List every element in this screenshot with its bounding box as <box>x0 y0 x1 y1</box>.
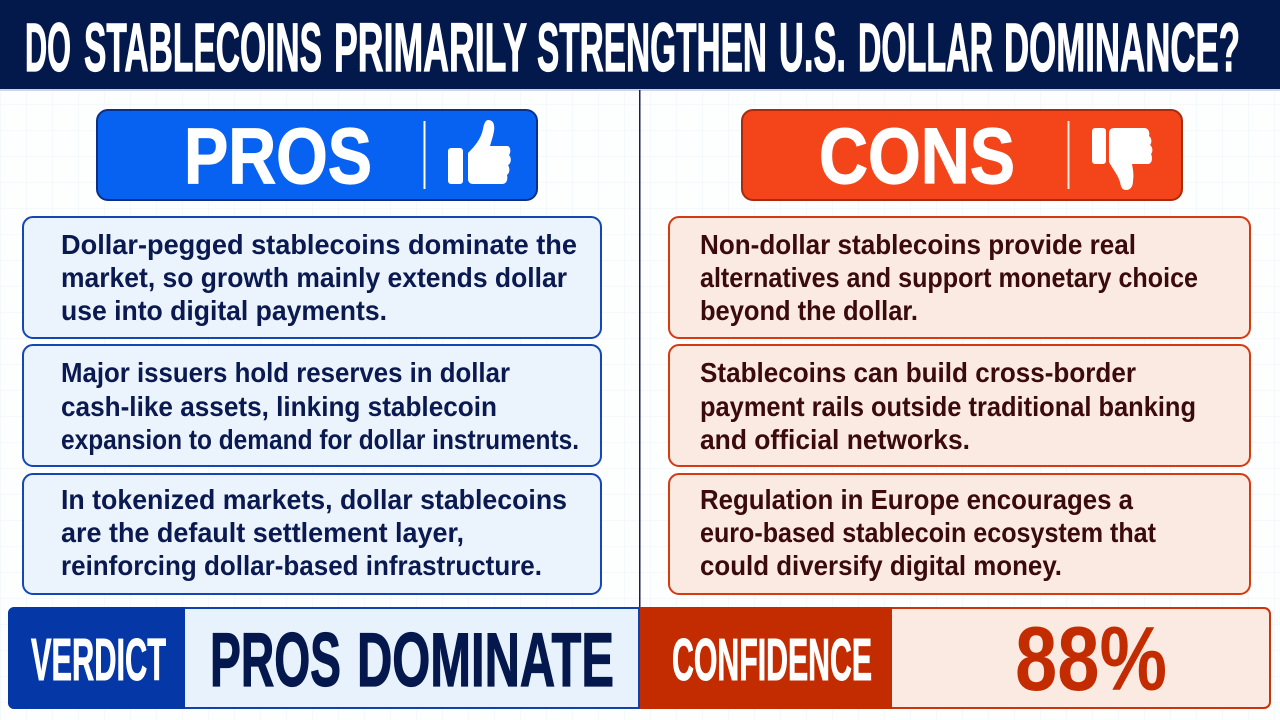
title banner: STRENGTHEN <box>537 9 767 86</box>
con card 3 <box>669 474 1250 594</box>
pro card 2 <box>23 345 601 466</box>
pros header <box>97 110 537 200</box>
title banner <box>0 0 1280 91</box>
panel: pros <box>23 110 601 594</box>
pros header: PROS <box>184 111 372 200</box>
pro card 2: expansion to demand for dollar instruments. <box>61 424 579 455</box>
con card 1: alternatives and support monetary choice <box>700 262 1198 293</box>
title banner: DO <box>25 9 71 86</box>
pro card 3: In tokenized markets, dollar stablecoins <box>61 484 567 515</box>
pro card 1: Dollar-pegged stablecoins dominate the <box>61 229 577 260</box>
verdict bar: DOMINATE <box>357 618 614 703</box>
con card 2: Stablecoins can build cross-border <box>700 357 1136 388</box>
con card 2 <box>669 345 1250 466</box>
con card 1: Non-dollar stablecoins provide real <box>700 229 1136 260</box>
verdict bar: PROS <box>210 618 341 703</box>
con card 1 <box>669 217 1250 338</box>
confidence bar <box>640 607 1270 710</box>
title banner: DOLLAR <box>858 9 993 86</box>
pro card 1: market, so growth mainly extends dollar <box>61 262 567 293</box>
icon: thumbs up <box>448 120 511 184</box>
verdict bar <box>8 607 639 709</box>
pro card 1: use into digital payments. <box>61 295 387 326</box>
con card 3: Regulation in Europe encourages a <box>700 484 1133 515</box>
con card 2: payment rails outside traditional banking <box>700 391 1196 422</box>
pro card 2: cash-like assets, linking stablecoin <box>61 391 497 422</box>
title banner: STABLECOINS <box>84 9 322 86</box>
cons header: CONS <box>819 111 1015 200</box>
verdict bar: VERDICT <box>31 627 166 693</box>
con card 1: beyond the dollar. <box>700 295 918 326</box>
panel: cons <box>669 110 1250 594</box>
pro card 3: reinforcing dollar-based infrastructure. <box>61 550 542 581</box>
title banner: U.S. <box>779 9 846 86</box>
cons header <box>742 110 1182 200</box>
pro card 3: are the default settlement layer, <box>61 517 464 548</box>
con card 3: could diversify digital money. <box>700 550 1062 581</box>
pro card 1 <box>23 217 601 338</box>
pro card 2: Major issuers hold reserves in dollar <box>61 357 510 388</box>
confidence bar: CONFIDENCE <box>672 627 872 693</box>
con card 2: and official networks. <box>700 424 970 455</box>
confidence bar: 88% <box>1015 609 1167 710</box>
pro card 3 <box>23 474 601 594</box>
title banner: PRIMARILY <box>334 9 527 86</box>
icon: thumbs down <box>1092 128 1152 190</box>
con card 3: euro-based stablecoin ecosystem that <box>700 517 1156 548</box>
